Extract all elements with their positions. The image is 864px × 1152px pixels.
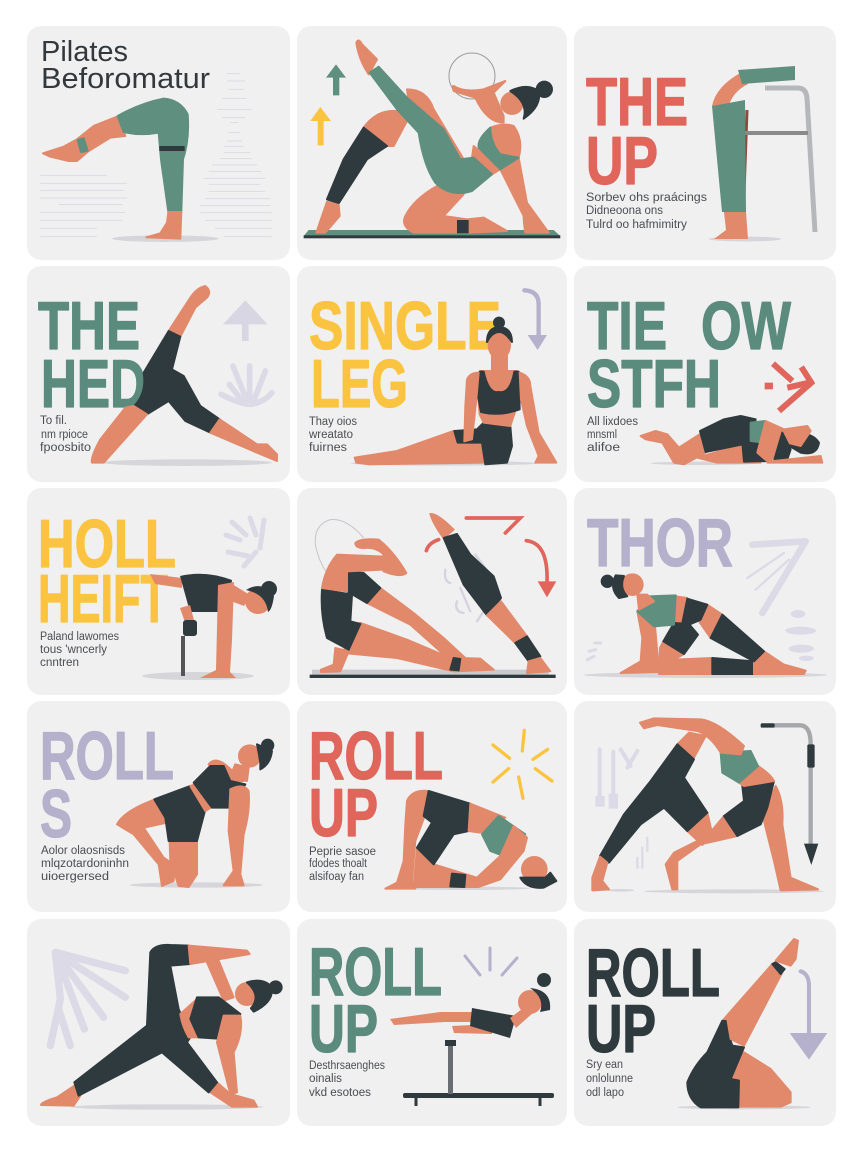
heading: UP bbox=[586, 991, 656, 1067]
figure: plank bbox=[390, 973, 551, 1038]
panel: card 13 bbox=[27, 919, 290, 1126]
panel: card 11 bbox=[297, 701, 567, 912]
panel: card 9 bbox=[574, 488, 836, 695]
heading: ROLL bbox=[309, 718, 443, 794]
figure: standing fold bbox=[712, 66, 795, 239]
text block: mlqzotardoninhn bbox=[41, 858, 129, 870]
text block bbox=[586, 192, 707, 231]
text block: alifoe bbox=[587, 442, 620, 454]
text block: mnsml bbox=[587, 429, 617, 441]
heading: THE bbox=[38, 288, 140, 364]
heading: THOR bbox=[587, 505, 733, 581]
text block: To fil. bbox=[40, 415, 67, 427]
heading: TIE bbox=[587, 288, 667, 364]
text block: tous 'wncerly bbox=[40, 644, 107, 656]
text block bbox=[309, 1060, 385, 1099]
panel: card 10 bbox=[27, 701, 290, 912]
text block bbox=[587, 416, 638, 454]
heading: UP bbox=[309, 775, 378, 851]
heading: THE bbox=[586, 64, 688, 140]
heading: ROLL bbox=[40, 718, 174, 794]
text block: alsifoay fan bbox=[309, 871, 364, 883]
panel: card 15 bbox=[574, 919, 836, 1126]
figure: pike pose bbox=[40, 74, 272, 242]
text block: Sorbev ohs praácings bbox=[586, 192, 707, 204]
panel: card 4 bbox=[27, 266, 290, 482]
text block: All lixdoes bbox=[587, 416, 638, 428]
text block: oinalis bbox=[309, 1073, 342, 1085]
figure: seated and arrow bbox=[350, 290, 556, 466]
text block: Peprie sasoe bbox=[309, 846, 376, 858]
text block: vkd esotoes bbox=[309, 1087, 371, 1099]
heading: STFH bbox=[587, 346, 721, 422]
panel: card 2 bbox=[297, 26, 567, 260]
figure: bridge and star bbox=[385, 730, 556, 890]
heading: HEIFT bbox=[38, 561, 168, 637]
text block bbox=[40, 415, 91, 454]
heading: HOLL bbox=[38, 506, 176, 582]
heading: S bbox=[40, 776, 72, 852]
figure: bent over bbox=[150, 574, 277, 678]
text block bbox=[41, 845, 129, 883]
text block: wreatato bbox=[308, 429, 353, 441]
text block: nm rpioce bbox=[41, 429, 88, 441]
text block: Sry ean bbox=[586, 1059, 623, 1071]
text block bbox=[308, 416, 357, 454]
heading: ROLL bbox=[309, 934, 442, 1010]
heading: Pilates: Pilates bbox=[41, 36, 128, 68]
text block: Didneoona ons bbox=[586, 205, 663, 217]
apparatus: bench bbox=[403, 1040, 554, 1106]
heading: OW bbox=[701, 288, 792, 364]
panel: card 7 bbox=[27, 488, 290, 695]
heading: Beforomatur: Beforomatur bbox=[41, 63, 210, 95]
panel: card 6 bbox=[574, 266, 836, 482]
text block bbox=[586, 1059, 633, 1099]
text block: Desthrsaenghes bbox=[309, 1060, 385, 1072]
icon: shell bbox=[226, 518, 264, 566]
panel: card 8 bbox=[297, 488, 567, 695]
figure: triangle twist and fan bbox=[41, 945, 283, 1110]
icon: burst bbox=[465, 948, 517, 975]
panel: card 14 bbox=[297, 919, 567, 1126]
heading: UP bbox=[586, 123, 658, 199]
figure: kneeling leg lift bbox=[304, 41, 560, 238]
text block: Paland lawomes bbox=[40, 631, 119, 643]
text block: fdodes thoalt bbox=[309, 858, 368, 870]
heading: HED bbox=[41, 346, 146, 422]
panel: card 1 Pilates bbox=[27, 26, 290, 260]
text block: Thay oios bbox=[309, 416, 357, 428]
text block: Tulrd oo hafmimitry bbox=[586, 219, 687, 231]
panel: card 12 bbox=[574, 701, 836, 912]
text block: uioergersed bbox=[41, 871, 109, 883]
heading: UP bbox=[309, 991, 378, 1067]
text block: onlolunne bbox=[586, 1073, 633, 1085]
figure: two poses and arrows bbox=[310, 514, 556, 678]
text block bbox=[309, 846, 376, 883]
figure: seated arm reach and arrow bbox=[677, 939, 827, 1109]
panel: card 3 bbox=[574, 26, 836, 260]
panel: card 5 bbox=[297, 266, 567, 482]
text block: fuirnes bbox=[309, 442, 347, 454]
figure: kneeling twist bbox=[117, 739, 274, 888]
figure: standing bend and pole bbox=[592, 718, 824, 893]
heading: SINGLE bbox=[309, 288, 501, 364]
heading: LEG bbox=[311, 346, 408, 422]
text block: Aolor olaosnisds bbox=[41, 845, 125, 857]
text block bbox=[40, 631, 119, 669]
figure: low lunge and marks bbox=[584, 541, 827, 678]
figure: lying and arrow bbox=[641, 364, 822, 465]
apparatus: barre bbox=[743, 88, 815, 232]
heading: ROLL bbox=[586, 935, 720, 1011]
text block: odl lapo bbox=[586, 1087, 624, 1099]
text block: cnntren bbox=[40, 657, 79, 669]
figure: triangle and icons bbox=[92, 286, 277, 466]
text block: fpoosbito bbox=[40, 442, 91, 454]
